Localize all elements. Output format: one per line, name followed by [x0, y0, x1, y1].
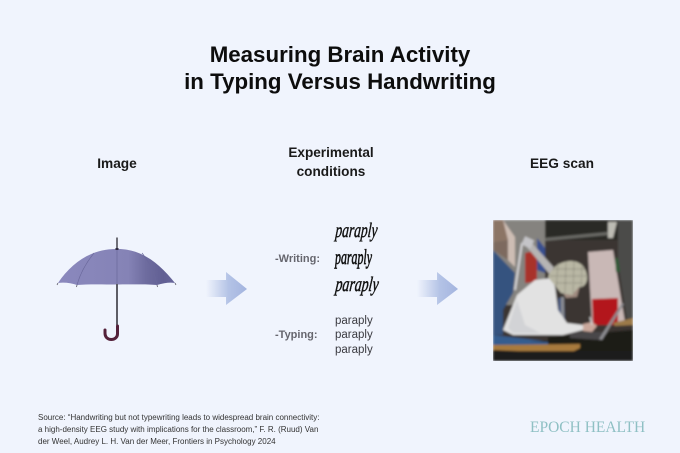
arrow: conditions to EEG — [420, 272, 458, 305]
source note: der Weel, Audrey L. H. Van der Meer, Frontiers in Psychology 2024 — [38, 437, 276, 446]
handwriting samples: paraply — [334, 246, 372, 270]
typed samples — [335, 315, 373, 356]
heading: experimental conditions — [288, 145, 374, 179]
title: Measuring Brain Activity — [210, 42, 470, 67]
typed samples: paraply — [335, 344, 373, 356]
typed samples: paraply — [335, 315, 373, 327]
arrow: image to conditions — [209, 272, 247, 305]
label: typing: -Typing: — [275, 329, 318, 341]
icon: umbrella — [56, 238, 176, 341]
photo: EEG scan participant — [493, 220, 633, 361]
title — [184, 42, 496, 94]
source note: Source: “Handwriting but not typewriting leads to widespread brain connectivity: — [38, 413, 319, 422]
typed samples: paraply — [335, 329, 373, 341]
heading: EEG scan: EEG scan — [530, 156, 594, 171]
source note — [38, 413, 319, 446]
heading: experimental conditions: Experimental — [288, 145, 374, 160]
heading: image: Image — [97, 156, 137, 171]
heading: experimental conditions: conditions — [297, 164, 365, 179]
source note: a high-density EEG study with implications for the classroom,” F. R. (Ruud) Van — [38, 425, 318, 434]
handwriting samples: paraply — [333, 219, 379, 243]
logo: Epoch Health: EPOCH HEALTH — [530, 419, 645, 436]
title: in Typing Versus Handwriting — [184, 69, 496, 94]
label: writing: -Writing: — [275, 253, 320, 265]
handwriting samples — [333, 219, 380, 297]
